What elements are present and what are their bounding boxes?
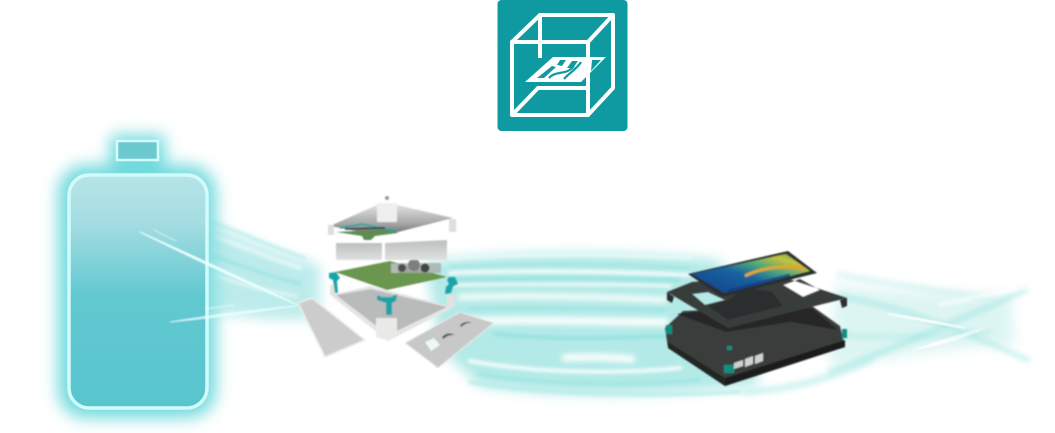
battery body [69,175,207,408]
battery [58,135,298,418]
middle wall panels [336,240,447,260]
top lid [328,196,456,240]
energy flow waves [212,222,1028,395]
touchscreen device [665,251,847,386]
battery terminal cap [117,141,158,160]
battery glow [58,135,216,418]
green connectors [666,325,847,373]
wave band: enclosure kit to device [425,253,760,395]
light streaks through battery [140,230,298,322]
wave band: battery to enclosure kit [212,222,320,320]
exploded enclosure kit [298,196,494,368]
base plate [330,285,455,341]
teal clips [329,272,458,315]
icon: circuit board [525,57,606,82]
icon: PCB inside transparent enclosure [498,0,628,131]
frame [667,275,847,328]
device base box [665,306,845,386]
device ports [734,353,763,369]
screen [688,251,817,297]
right side panel with cut-outs [405,312,494,368]
icon: wireframe cube [512,15,613,115]
left side panel [298,298,365,357]
circuit board [335,259,447,290]
wave band: device to right edge [745,275,1028,392]
